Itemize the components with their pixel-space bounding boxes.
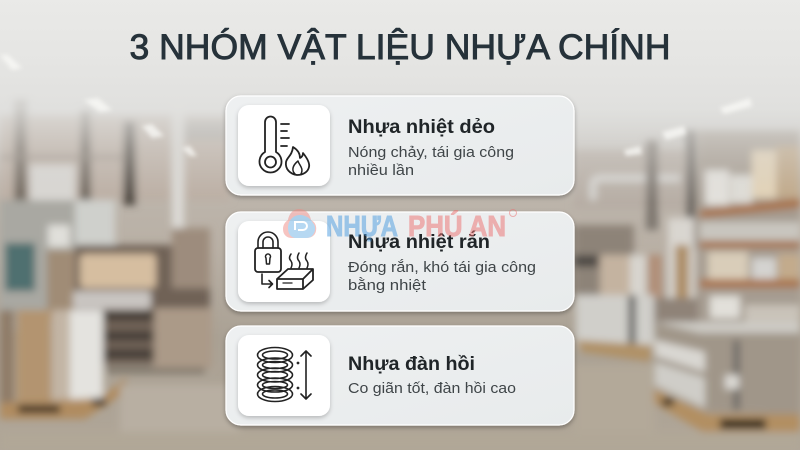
icon tile: thermometer and flame	[238, 105, 330, 186]
description: Nóng chảy, tái gia công	[348, 144, 514, 161]
floor highlights	[0, 365, 800, 450]
heading: Nhựa nhiệt dẻo	[348, 117, 495, 138]
icon tile: spring and arrow	[238, 335, 330, 416]
right stack on pallet	[652, 322, 800, 435]
right background	[574, 130, 739, 362]
title: 3 NHÓM VẬT LIỆU NHỰA CHÍNH	[130, 28, 670, 67]
description: Đóng rắn, khó tái gia công	[348, 259, 536, 276]
watermark: Nhựa Phú An logo	[283, 209, 516, 243]
heading: Nhựa đàn hồi	[348, 354, 475, 375]
left wall	[0, 100, 230, 230]
description: bằng nhiệt	[348, 277, 427, 294]
description	[348, 144, 514, 179]
card: Nhựa nhiệt rắn	[226, 212, 574, 311]
watermark: Nhựa Phú An logo: NHỰA	[326, 211, 398, 243]
right shelving	[698, 130, 800, 350]
description	[348, 259, 536, 294]
icon tile: lock, heat and block	[238, 221, 330, 302]
ceiling lights	[0, 55, 752, 156]
heading: Nhựa nhiệt rắn	[348, 231, 490, 253]
left rolls on pallet	[0, 310, 126, 419]
watermark: Nhựa Phú An logo: PHÚ AN	[408, 209, 506, 243]
card: Nhựa nhiệt dẻo	[226, 96, 574, 195]
card: Nhựa đàn hồi	[226, 326, 574, 425]
description: nhiều lần	[348, 162, 414, 179]
description: Co giãn tốt, đàn hồi cao	[348, 380, 516, 397]
left machine	[0, 200, 212, 373]
